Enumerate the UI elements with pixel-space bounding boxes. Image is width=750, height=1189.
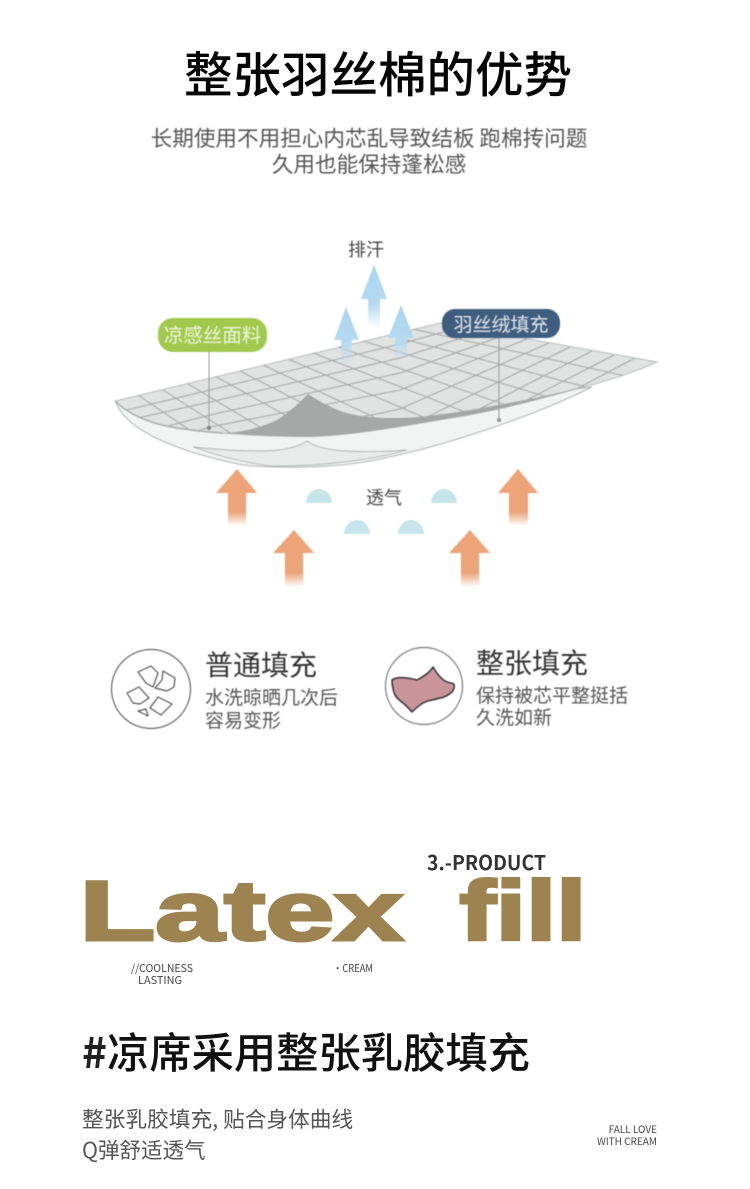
anchor dot: filling [497,418,501,422]
callout line: filling [498,338,500,420]
orange arrow 1 [216,469,257,526]
small caption: cream: ·CREAM [333,961,373,976]
text: regular fill description [205,683,338,733]
diagram: breathable mattress layers [110,236,657,587]
callout: silk fill: 羽丝绒填充 [453,310,549,337]
inner seam [193,441,407,466]
section tag: 3.-PRODUCT [427,847,546,876]
icon: whole fill sheet [386,648,462,724]
callout: cool silk fabric: 凉感丝面料 [164,319,261,348]
mattress top surface with grid [114,322,658,437]
body text: 整张乳胶填充, 贴合身体曲线 [82,1103,353,1134]
subtitle [151,122,587,179]
blue arrow: sweat up right [388,305,414,361]
section heading: #凉席采用整张乳胶填充 [82,1020,530,1081]
air bubbles [306,489,457,534]
big heading: Latex fill: fill [460,864,586,958]
label: breathable: 透气 [366,484,402,510]
comparison: regular fill [112,644,338,733]
small caption: coolness lasting: LASTING [138,973,182,988]
big heading: Latex fill [80,864,586,958]
orange arrow 3 [273,530,314,587]
text: whole fill description: 久洗如新 [476,703,552,730]
heading: regular fill: 普通填充 [205,644,317,684]
small caption: fall love: WITH CREAM [597,1133,657,1148]
text: whole fill description: 保持被芯平整挺括 [476,681,628,708]
mattress underside [116,387,592,467]
heading: whole fill: 整张填充 [476,642,588,682]
front edge line [115,401,223,433]
text: regular fill description: 水洗晾晒几次后 [205,683,338,710]
infographic page [82,50,658,1162]
title: 整张羽丝棉的优势 [184,36,572,106]
text: regular fill description: 容易变形 [205,706,281,733]
small caption: coolness lasting: //COOLNESS [131,961,193,976]
big heading: Latex fill: Latex [80,865,403,958]
subtitle: 长期使用不用担心内芯乱导致结板 跑棉抟问题 [151,122,587,153]
body text [82,1103,353,1165]
orange arrow 2 [498,469,538,526]
blue arrow: sweat up left [334,307,359,364]
small caption: fall love [597,1121,657,1148]
peeled grey filling layer [223,384,592,437]
small caption: coolness lasting [131,961,193,988]
comparison: whole-piece fill [386,642,628,730]
small caption: fall love: FALL LOVE [609,1121,657,1136]
label: sweat: 排汗 [348,236,384,262]
orange arrow 4 [449,530,490,587]
callout line: cool silk [208,351,210,428]
text: whole fill description [476,681,628,730]
anchor dot: cool silk [207,426,211,430]
body text: Q弹舒适透气 [82,1134,205,1165]
subtitle: 久用也能保持蓬松感 [272,148,466,179]
blue arrow: sweat up centre [361,265,387,328]
icon: broken fill pieces [112,650,190,728]
